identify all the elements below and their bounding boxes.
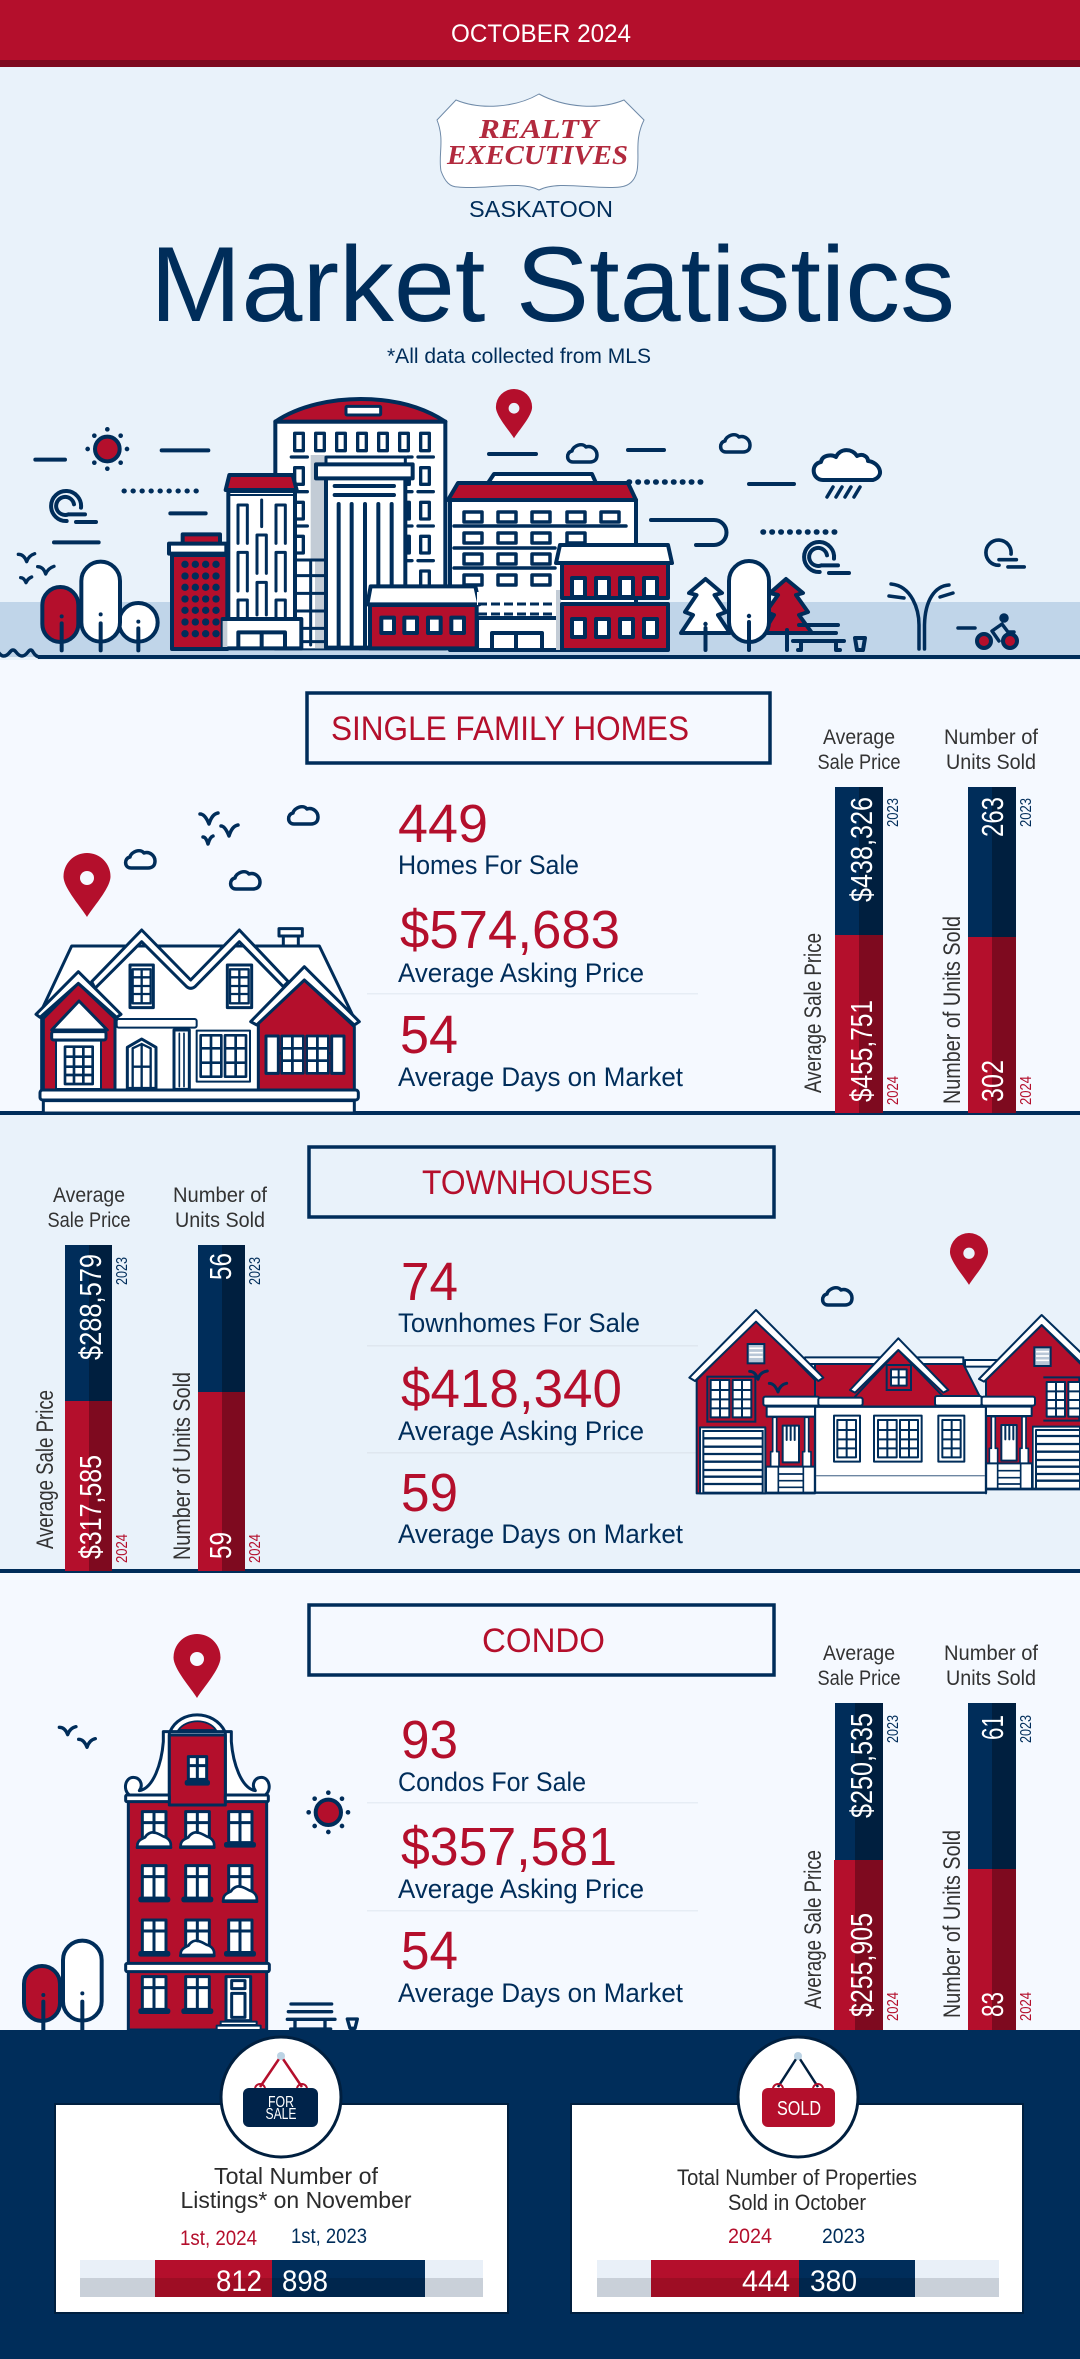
heading: condo bbox=[309, 1605, 774, 1675]
data source note: *All data collected from MLS bbox=[387, 345, 651, 368]
card: total listings: 1st, 2023 bbox=[291, 2225, 367, 2248]
bar chart: townhouse units sold: Units Sold bbox=[175, 1209, 265, 1232]
ground line and water bbox=[0, 650, 1080, 657]
homes for sale bbox=[398, 794, 579, 880]
park bench and bin bbox=[793, 625, 865, 650]
days on market: 59 bbox=[401, 1463, 458, 1523]
heading: single family homes: SINGLE FAMILY HOMES bbox=[331, 710, 689, 748]
logo: Realty Executives shield: EXECUTIVES bbox=[446, 140, 628, 170]
bar chart: townhouse units sold: 2024 bbox=[247, 1534, 264, 1563]
bar chart: townhouse sale price bbox=[32, 1184, 131, 1571]
asking price bbox=[398, 1359, 644, 1446]
card: properties sold: Sold in October bbox=[728, 2190, 866, 2215]
asking price: Average Asking Price bbox=[398, 1416, 644, 1446]
bar chart: single family units sold: 2023 bbox=[1018, 798, 1035, 827]
city skyline illustration bbox=[0, 389, 1080, 657]
bar chart: single family sale price: 2024 bbox=[885, 1076, 902, 1105]
left trees bbox=[42, 562, 158, 650]
asking price: $574,683 bbox=[400, 900, 620, 960]
bar chart: single family units sold: Number of bbox=[944, 726, 1038, 749]
bar chart: condo sale price: Average bbox=[823, 1642, 895, 1665]
swirl wind right bbox=[804, 542, 849, 573]
bar chart: condo sale price: Average Sale Price bbox=[800, 1850, 827, 2009]
bar chart: single family units sold: Number of Units Sold bbox=[939, 916, 966, 1104]
comparison bar: 444 bbox=[742, 2265, 790, 2298]
belt course bbox=[126, 1963, 269, 1972]
bar chart: townhouse sale price: 2024 bbox=[114, 1534, 131, 1563]
low red building left bbox=[367, 586, 479, 648]
right trees and pine trees bbox=[681, 561, 812, 650]
asking price bbox=[398, 900, 644, 988]
footer panel bbox=[0, 2030, 1080, 2359]
for sale sign icon bbox=[221, 2037, 341, 2157]
asking price: Average Asking Price bbox=[398, 1874, 644, 1904]
days on market: 54 bbox=[401, 1921, 458, 1981]
bar chart: condo sale price: 2024 bbox=[885, 1992, 902, 2021]
bar chart: condo units sold: 2023 bbox=[1018, 1715, 1035, 1743]
bar chart: townhouse sale price: Average bbox=[53, 1184, 125, 1207]
condos for sale: 93 bbox=[401, 1710, 458, 1770]
fountain bbox=[889, 584, 953, 649]
sun bbox=[309, 1793, 348, 1832]
heading: condo: CONDO bbox=[482, 1622, 605, 1660]
comparison bar bbox=[597, 2260, 999, 2298]
condo building illustration bbox=[24, 1715, 357, 2030]
section line: townhouses bottom bbox=[0, 1569, 1080, 1573]
comparison bar: 812 bbox=[216, 2265, 262, 2298]
red building right bbox=[556, 545, 672, 650]
bar chart: single family sale price: Average Sale Price bbox=[800, 933, 827, 1093]
door bbox=[226, 1977, 251, 2021]
cyclist bbox=[958, 615, 1017, 648]
logo: Realty Executives shield: REALTY bbox=[478, 114, 601, 144]
icon: map pin and clouds, single family bbox=[64, 807, 318, 917]
card: total listings: Listings* on November bbox=[180, 2187, 412, 2213]
tall slotted building bbox=[223, 475, 301, 648]
flower boxes bbox=[137, 1832, 257, 1955]
bar chart: townhouse sale price: 2023 bbox=[114, 1257, 131, 1285]
swirl wind far right bbox=[986, 540, 1024, 567]
ground band bbox=[0, 602, 1080, 657]
for sale sign icon: FOR bbox=[268, 2094, 294, 2111]
bar chart: single family sale price: 2023 bbox=[885, 798, 902, 827]
stats: single family bbox=[367, 794, 698, 1092]
trees bbox=[24, 1941, 102, 2030]
asking price: $357,581 bbox=[401, 1817, 617, 1877]
windows bbox=[142, 1757, 252, 2009]
bar chart: condo units sold: 2024 bbox=[1018, 1992, 1035, 2021]
map pin bbox=[496, 389, 532, 438]
days on market bbox=[398, 1463, 683, 1549]
condos for sale: Condos For Sale bbox=[398, 1767, 586, 1797]
bar chart: townhouse sale price: $317,585 bbox=[73, 1455, 108, 1559]
birds bbox=[59, 1727, 95, 1747]
section line: single family bottom bbox=[0, 1111, 1080, 1115]
for sale sign icon: SALE bbox=[266, 2106, 296, 2123]
bench and bin bbox=[287, 2004, 357, 2029]
icon: map pin, condo bbox=[174, 1634, 220, 1698]
townhomes for sale: 74 bbox=[401, 1252, 458, 1312]
window sills bbox=[138, 1780, 256, 2014]
stats: condo bbox=[367, 1710, 698, 2008]
condos for sale bbox=[398, 1710, 586, 1797]
bar chart: single family sale price: $455,751 bbox=[844, 1000, 879, 1102]
card: total listings bbox=[55, 2037, 508, 2313]
bar chart: condo sale price bbox=[800, 1642, 902, 2030]
header bar bbox=[0, 0, 1080, 67]
bar chart: townhouse units sold: 56 bbox=[203, 1253, 238, 1280]
left side sky decorations bbox=[18, 429, 208, 583]
bar chart: condo sale price: Sale Price bbox=[818, 1667, 900, 1690]
red and white apartment block bbox=[448, 474, 636, 650]
comparison bar: 898 bbox=[282, 2265, 328, 2298]
stats: townhouses bbox=[367, 1252, 698, 1549]
bar chart: condo sale price: 2023 bbox=[885, 1715, 902, 1743]
bar chart: single family sale price: Sale Price bbox=[818, 751, 900, 774]
comparison bar bbox=[80, 2260, 483, 2298]
bar chart: single family units sold: 263 bbox=[975, 797, 1010, 837]
asking price: Average Asking Price bbox=[398, 958, 644, 988]
heading: townhouses bbox=[309, 1147, 774, 1217]
homes for sale: 449 bbox=[398, 794, 488, 854]
card: total listings: 1st, 2024 bbox=[180, 2227, 257, 2250]
days on market: Average Days on Market bbox=[398, 1062, 683, 1092]
big domed tower bbox=[275, 399, 445, 648]
right side sky decorations bbox=[489, 435, 880, 545]
bar chart: condo units sold: Units Sold bbox=[946, 1667, 1036, 1690]
bar chart: single family units sold: 302 bbox=[975, 1060, 1010, 1102]
house illustration: single family bbox=[36, 929, 359, 1113]
bar chart: single family units sold bbox=[939, 726, 1038, 1113]
bar chart: single family sale price: $438,326 bbox=[844, 797, 879, 902]
bar chart: condo units sold bbox=[939, 1642, 1038, 2030]
logo: Realty Executives shield bbox=[437, 94, 644, 222]
bar chart: townhouse units sold: 59 bbox=[203, 1532, 238, 1559]
bar chart: condo units sold: Number of bbox=[944, 1642, 1038, 1665]
title: Market Statistics bbox=[150, 224, 955, 344]
bar chart: townhouse sale price: Sale Price bbox=[48, 1209, 130, 1232]
bar chart: townhouse units sold: Number of bbox=[173, 1184, 267, 1207]
icon: map pin and cloud, townhouses bbox=[823, 1233, 988, 1305]
asking price bbox=[398, 1817, 644, 1904]
heading: townhouses: TOWNHOUSES bbox=[422, 1164, 653, 1202]
bar chart: condo sale price: $250,535 bbox=[844, 1713, 879, 1818]
low white storefront bbox=[477, 590, 561, 650]
bar chart: single family sale price bbox=[800, 726, 902, 1113]
header bar: OCTOBER 2024 bbox=[451, 20, 631, 48]
heading: single family homes bbox=[307, 693, 770, 763]
sold sign icon bbox=[738, 2037, 858, 2157]
bar chart: condo units sold: Number of Units Sold bbox=[939, 1830, 966, 2018]
card: total listings: Total Number of bbox=[214, 2163, 379, 2189]
card: properties sold: Total Number of Properties bbox=[677, 2165, 917, 2190]
bar chart: townhouse units sold: 2023 bbox=[247, 1257, 264, 1285]
days on market: Average Days on Market bbox=[398, 1519, 683, 1549]
days on market: 54 bbox=[400, 1005, 458, 1065]
comparison bar: 380 bbox=[810, 2265, 857, 2298]
logo: Realty Executives shield: SASKATOON bbox=[469, 196, 613, 222]
days on market: Average Days on Market bbox=[398, 1978, 683, 2008]
bar chart: condo units sold: 61 bbox=[975, 1715, 1010, 1740]
building body bbox=[128, 1800, 267, 2030]
bar chart: townhouse sale price: $288,579 bbox=[73, 1254, 108, 1360]
bar chart: condo units sold: 83 bbox=[975, 1992, 1010, 2017]
sold sign icon: SOLD bbox=[777, 2098, 821, 2120]
days on market bbox=[398, 1921, 683, 2008]
card: properties sold bbox=[571, 2037, 1023, 2313]
homes for sale: Homes For Sale bbox=[398, 850, 579, 880]
bar chart: single family sale price: Average bbox=[823, 726, 895, 749]
townhouse illustration bbox=[689, 1310, 1080, 1493]
bar chart: townhouse units sold bbox=[169, 1184, 267, 1571]
central columned tower bbox=[316, 457, 413, 648]
townhomes for sale bbox=[398, 1252, 640, 1338]
bar chart: single family units sold: 2024 bbox=[1018, 1076, 1035, 1105]
bar chart: townhouse sale price: Average Sale Price bbox=[32, 1390, 59, 1549]
bar chart: condo sale price: $255,905 bbox=[844, 1913, 879, 2017]
bar chart: townhouse units sold: Number of Units Sold bbox=[169, 1372, 196, 1560]
card: properties sold: 2024 bbox=[728, 2225, 772, 2248]
small red dotted tower bbox=[169, 534, 227, 649]
townhomes for sale: Townhomes For Sale bbox=[398, 1308, 640, 1338]
card: properties sold: 2023 bbox=[822, 2225, 865, 2248]
asking price: $418,340 bbox=[401, 1359, 622, 1419]
bar chart: single family units sold: Units Sold bbox=[946, 751, 1036, 774]
days on market bbox=[398, 1005, 683, 1092]
